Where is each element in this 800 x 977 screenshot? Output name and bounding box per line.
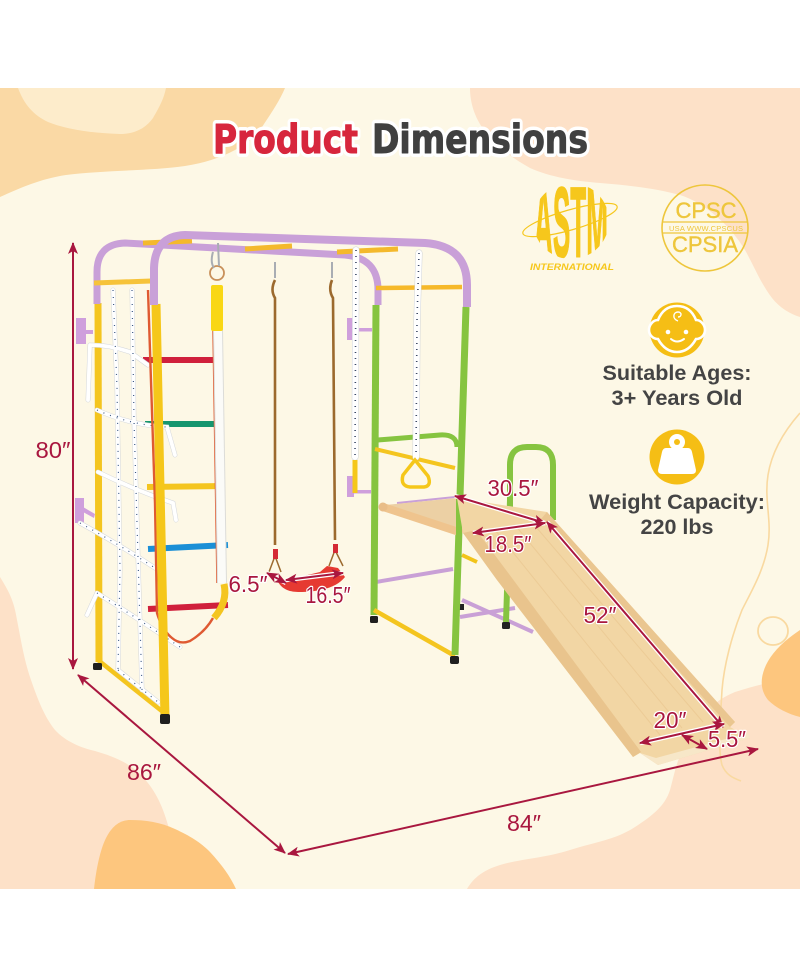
label: 30.5: 30.5″ — [488, 475, 538, 501]
front arch — [154, 235, 467, 724]
slide — [457, 498, 750, 765]
badge: CPSC CPSIA: USA WWW.CPSCUS — [669, 224, 743, 233]
label: 80: 80″ — [36, 437, 70, 463]
back lower cross bars — [376, 500, 533, 632]
label: 16.5: 16.5″ — [306, 582, 350, 608]
climbing net — [80, 290, 180, 702]
climbing rope — [148, 243, 225, 642]
label: 84: 84″ — [507, 810, 541, 836]
wall brackets — [75, 318, 372, 523]
arrow: slide 5.5 — [682, 735, 707, 749]
label: 6.5: 6.5″ — [228, 571, 268, 597]
arrow: platform 30.5 — [455, 496, 545, 523]
swing — [269, 262, 345, 592]
gym ring assembly — [375, 253, 457, 487]
text: weight capacity: 220 lbs — [640, 516, 714, 539]
badge: ASTM International: INTERNATIONAL — [530, 262, 614, 272]
arrow: depth 86 — [78, 675, 285, 853]
icon: weight — [650, 430, 704, 484]
text: suitable ages: 3+ Years Old — [612, 387, 742, 410]
label: 18.5: 18.5″ — [484, 531, 532, 557]
icon: baby face — [649, 302, 705, 358]
arrow: slide 52 — [547, 522, 723, 727]
ladder rungs — [143, 360, 228, 609]
text: weight capacity: Weight Capacity: — [589, 491, 765, 514]
label: 20: 20″ — [654, 707, 686, 733]
label: 52: 52″ — [584, 602, 616, 628]
badge: CPSC CPSIA — [662, 185, 748, 271]
title: Dimensions — [372, 117, 588, 163]
arrow: slide 20 — [640, 724, 724, 743]
title — [213, 117, 588, 163]
badge: CPSC CPSIA: CPSC — [675, 198, 737, 223]
play set frame — [75, 235, 750, 765]
back arch — [93, 241, 462, 712]
text: weight capacity — [589, 491, 765, 539]
platform — [378, 497, 465, 545]
title: Product — [213, 117, 358, 163]
arrow: seat 6.5 — [267, 573, 286, 583]
side rope — [355, 250, 356, 493]
arrow: height 80 — [72, 243, 74, 669]
label: 86: 86″ — [127, 759, 161, 785]
text: suitable ages — [602, 362, 752, 410]
badge: ASTM International — [522, 186, 618, 270]
arrow: width 84 — [288, 749, 758, 854]
arrow: platform 18.5 — [473, 523, 545, 533]
badge: CPSC CPSIA: CPSIA — [672, 232, 738, 257]
text: suitable ages: Suitable Ages: — [602, 362, 752, 385]
title: Product — [213, 117, 358, 163]
label: 5.5: 5.5″ — [708, 726, 746, 752]
slide handle — [510, 447, 553, 520]
title: Dimensions — [372, 117, 588, 163]
arrow: seat 16.5 — [286, 573, 343, 580]
